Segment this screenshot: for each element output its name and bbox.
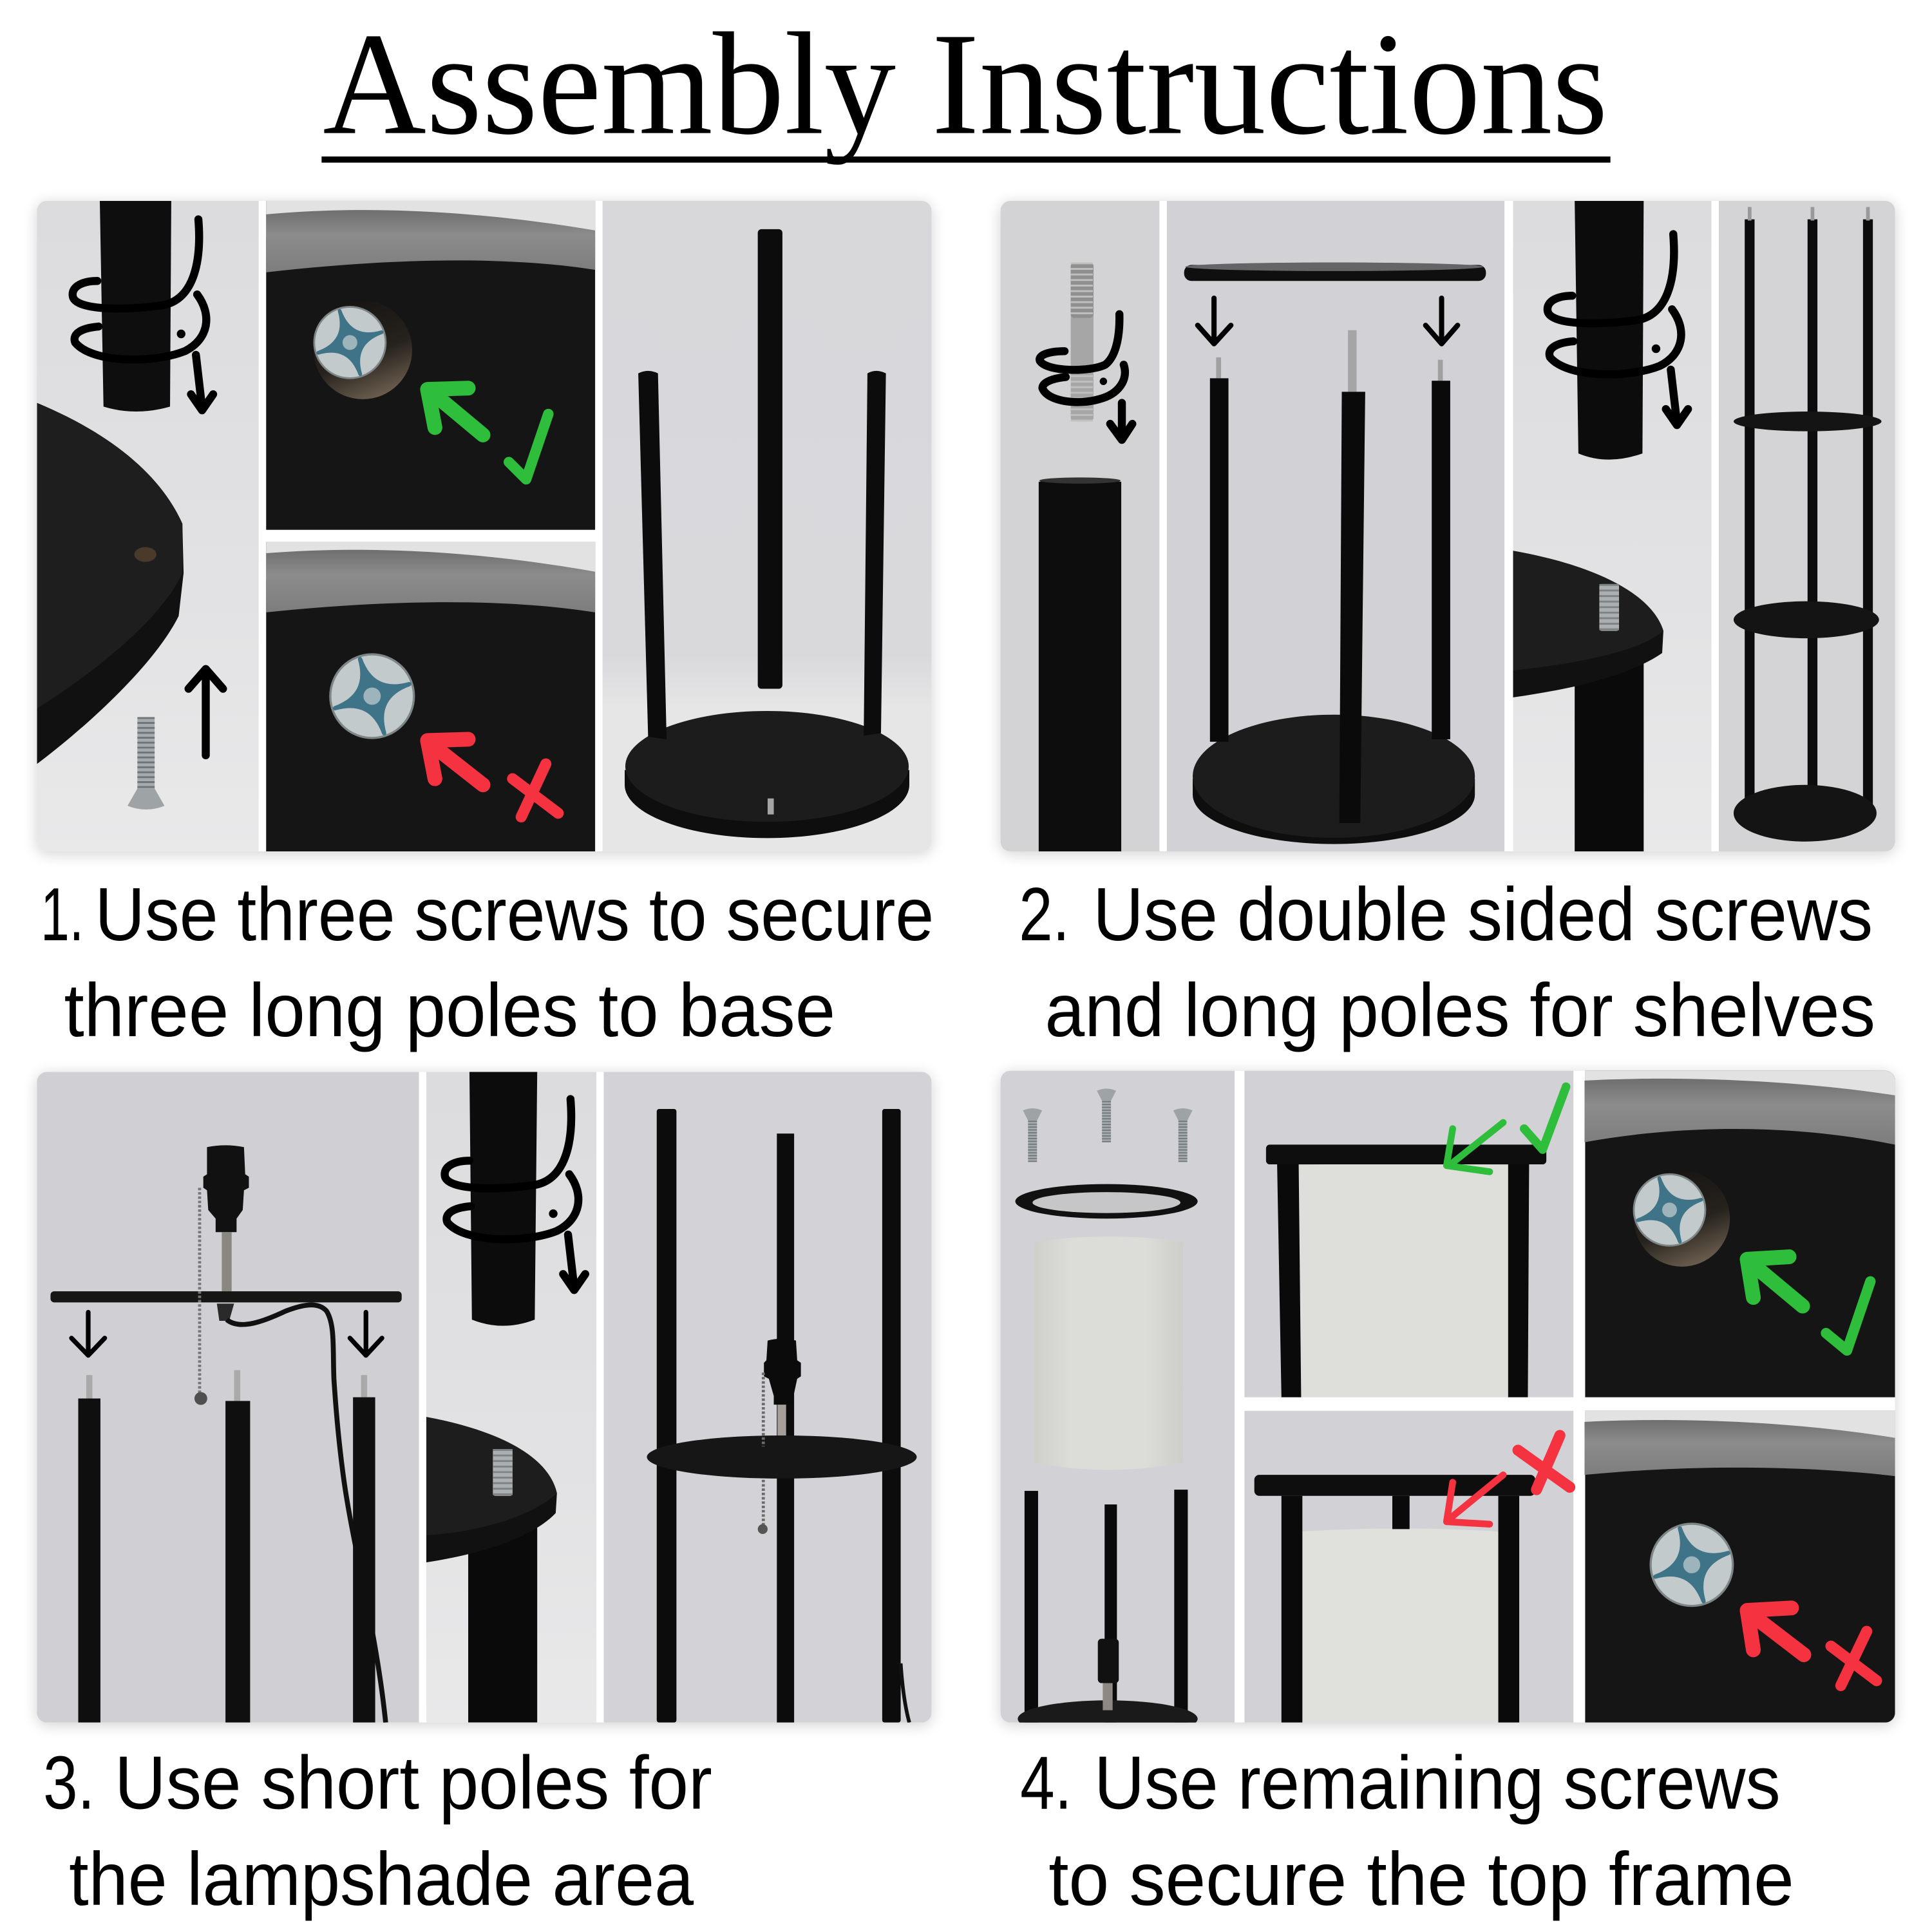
panel: step 2 photos bbox=[1001, 201, 1895, 851]
arrow: red bbox=[1446, 1475, 1503, 1524]
caption: step 1: three long poles to base bbox=[64, 968, 835, 1052]
caption: step 4: to secure the top frame bbox=[1048, 1837, 1794, 1921]
arrow: red bbox=[1747, 1608, 1804, 1655]
photo: correct frame fit bbox=[1244, 1071, 1573, 1397]
caption: step 2: Use double sided screws bbox=[1093, 872, 1873, 956]
photo: incorrect frame fit bbox=[1244, 1411, 1573, 1723]
caption: step 2: 2. bbox=[1019, 872, 1070, 956]
photo: socket shelf above short poles bbox=[37, 1072, 419, 1723]
icon: green check bbox=[1524, 1087, 1566, 1150]
arrow: up bbox=[189, 669, 223, 755]
caption: step 3: the lampshade area bbox=[69, 1837, 694, 1921]
photo: assembled socket shelf bbox=[604, 1072, 931, 1723]
caption: step 3 bbox=[43, 1741, 712, 1921]
panel: step 3 photos bbox=[37, 1072, 931, 1723]
caption: step 4: 4. bbox=[1020, 1741, 1072, 1825]
photo: incorrect protruding screw bbox=[266, 542, 595, 851]
caption: step 2: and long poles for shelves bbox=[1045, 968, 1875, 1052]
icon: turn arrow bbox=[1039, 314, 1132, 440]
arrow: down right bbox=[350, 1312, 382, 1356]
photo: pole screwed to stud on shelf bbox=[1513, 201, 1712, 851]
icon: top ring bbox=[1016, 1184, 1198, 1218]
icon: screw bbox=[128, 717, 164, 810]
title: Assembly Instructions bbox=[323, 3, 1608, 166]
cable bbox=[227, 1305, 386, 1723]
caption: step 3: Use short poles for bbox=[115, 1741, 712, 1825]
arrow: green bbox=[428, 388, 483, 435]
photo: double sided screw above pole bbox=[1001, 201, 1159, 851]
arrow: red bbox=[428, 739, 483, 785]
lampshade bbox=[1034, 1236, 1183, 1470]
icon: red cross bbox=[1518, 1435, 1570, 1490]
photo: incorrect protruding screw bbox=[1584, 1411, 1895, 1723]
photo: correct recessed screw bbox=[1584, 1071, 1895, 1397]
caption: step 1: Use three screws to secure bbox=[95, 872, 934, 956]
photo: correct recessed screw bbox=[266, 201, 595, 530]
photo: short pole onto stud bbox=[426, 1072, 596, 1723]
photo: completed shelf tower bbox=[1719, 201, 1895, 851]
icon: green check bbox=[1826, 1282, 1870, 1350]
icon: green check bbox=[509, 414, 548, 479]
photo: exploded lampshade parts bbox=[1001, 1071, 1235, 1738]
arrow: down left bbox=[1198, 298, 1231, 344]
panel: step 1 photos bbox=[37, 201, 931, 851]
caption: step 1: 1. bbox=[41, 872, 84, 956]
icon: red cross bbox=[1831, 1631, 1877, 1685]
caption: step 3: 3. bbox=[43, 1741, 95, 1825]
panel: step 4 photos bbox=[1001, 1071, 1895, 1738]
arrow: green bbox=[1446, 1122, 1503, 1172]
photo: pole above base with screw bbox=[37, 201, 259, 851]
arrow: down right bbox=[1426, 298, 1457, 344]
icon: lamp socket bbox=[204, 1145, 249, 1232]
photo: shelf above three poles bbox=[1167, 201, 1504, 851]
caption: step 2 bbox=[1019, 872, 1875, 1052]
arrow: green bbox=[1747, 1257, 1803, 1306]
photo: three long poles on base bbox=[603, 201, 931, 851]
icon: red cross bbox=[513, 764, 558, 817]
caption: step 1 bbox=[41, 872, 934, 1052]
caption: step 4: Use remaining screws bbox=[1094, 1741, 1781, 1825]
arrow: down left bbox=[71, 1312, 105, 1356]
caption: step 4 bbox=[1020, 1741, 1794, 1921]
icon: double sided screw bbox=[1071, 263, 1094, 421]
